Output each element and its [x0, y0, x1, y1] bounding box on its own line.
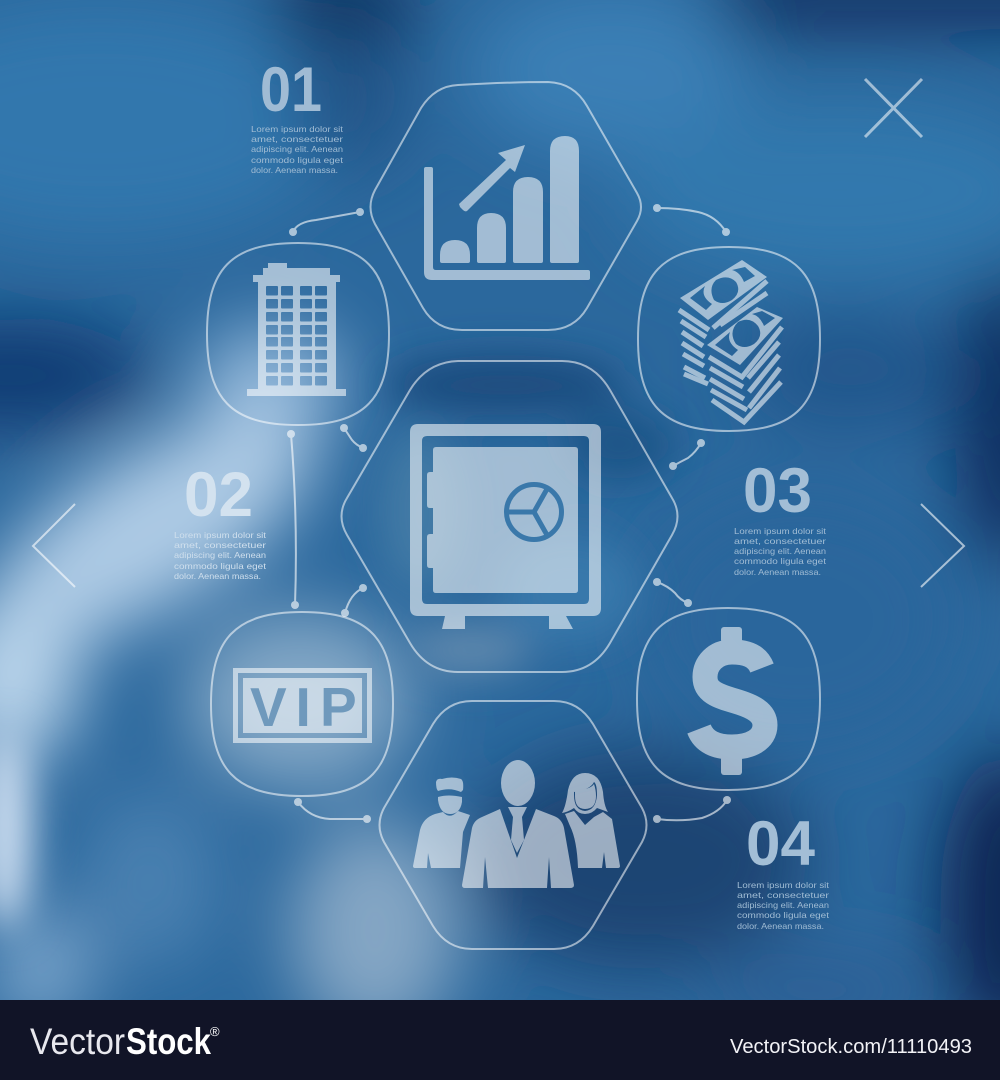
connectors — [287, 204, 731, 823]
footer logo: Vector — [30, 1021, 125, 1062]
text block: 02: amet, consectetuer — [174, 540, 266, 550]
icon: business team — [413, 760, 620, 888]
text block: 04: Lorem ipsum dolor sit — [737, 880, 830, 890]
text block: 01: dolor. Aenean massa. — [251, 165, 338, 175]
icon: close X — [865, 79, 922, 137]
text block: 03: Lorem ipsum dolor sit — [734, 526, 827, 536]
text block: 01: amet, consectetuer — [251, 134, 343, 144]
text block: 04: dolor. Aenean massa. — [737, 921, 824, 931]
text block: 02: adipiscing elit. Aenean — [174, 550, 266, 560]
heading: 02: 02 — [184, 460, 253, 530]
panel: building circle — [207, 243, 389, 425]
footer logo — [30, 1021, 220, 1062]
text block: 01 — [251, 124, 344, 175]
text block: 04: commodo ligula eget — [737, 910, 830, 920]
panel: bottom hexagon — [380, 701, 646, 949]
text block: 01: Lorem ipsum dolor sit — [251, 124, 344, 134]
icon: VIP badge: VIP — [250, 676, 357, 738]
text block: 03: adipiscing elit. Aenean — [734, 546, 826, 556]
heading: 03: 03 — [743, 456, 812, 526]
text block: 02 — [174, 530, 267, 581]
panel: dollar circle — [637, 608, 820, 790]
footer bar — [0, 1000, 1000, 1080]
panel: VIP circle — [211, 612, 393, 796]
text block: 02: commodo ligula eget — [174, 561, 267, 571]
text block: 04: adipiscing elit. Aenean — [737, 900, 829, 910]
text block: 04 — [737, 880, 830, 931]
icon: safe — [410, 424, 601, 629]
footer logo: Stock — [126, 1021, 211, 1062]
text block: 04: amet, consectetuer — [737, 890, 829, 900]
heading: 04: 04 — [746, 809, 815, 879]
text block: 03: dolor. Aenean massa. — [734, 567, 821, 577]
arrow: previous — [33, 504, 75, 587]
icon: money stacks — [679, 260, 783, 422]
text block: 01: commodo ligula eget — [251, 155, 344, 165]
text block: 03 — [734, 526, 827, 577]
text block: 03: amet, consectetuer — [734, 536, 826, 546]
text block: 02: dolor. Aenean massa. — [174, 571, 261, 581]
panel: top hexagon — [370, 82, 641, 330]
arrow: next — [921, 504, 964, 587]
panel: centre hexagon — [342, 361, 678, 672]
footer logo: ® — [210, 1024, 220, 1039]
text block: 03: commodo ligula eget — [734, 556, 827, 566]
footer url: VectorStock.com/11110493 — [730, 1036, 972, 1058]
heading: 01: 01 — [260, 55, 322, 125]
icon: building — [247, 263, 346, 396]
icon: VIP badge — [233, 668, 372, 743]
icon: dollar sign — [699, 627, 765, 775]
text block: 02: Lorem ipsum dolor sit — [174, 530, 267, 540]
text block: 01: adipiscing elit. Aenean — [251, 144, 343, 154]
icon: bar chart with arrow — [424, 136, 590, 280]
panel: money circle — [638, 247, 820, 431]
